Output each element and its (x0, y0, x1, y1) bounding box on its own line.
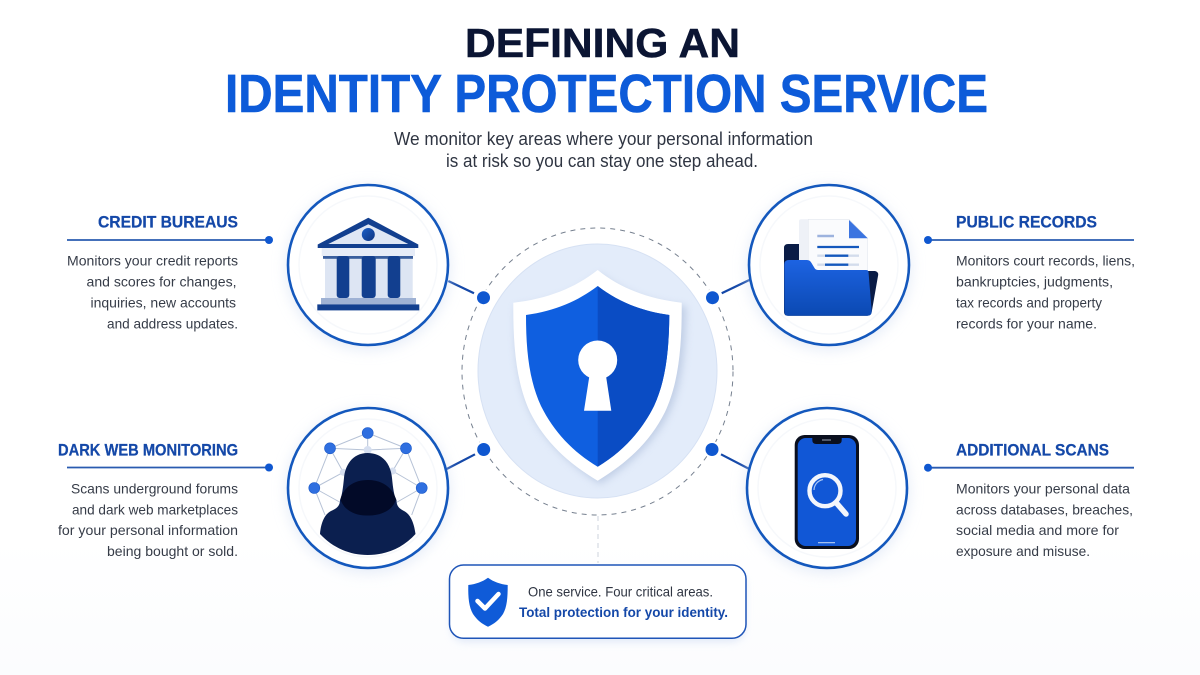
text: additional scans description: exposure and misuse. (956, 543, 1090, 559)
text: dark web monitoring description: being bought or sold. (107, 543, 238, 559)
text: public records description: tax records and property (956, 294, 1102, 310)
connector: hub to callout (597, 516, 599, 563)
text: credit bureaus description (67, 253, 238, 332)
title: DEFINING AN (465, 20, 740, 66)
panel: additional scans circle (745, 408, 909, 573)
heading: credit bureaus: CREDIT BUREAUS (98, 214, 238, 232)
panel: public records circle (747, 185, 911, 350)
panel: credit bureaus circle (286, 185, 450, 350)
text: public records description (956, 253, 1135, 332)
panel: central shield hub (462, 228, 733, 515)
text: dark web monitoring description (58, 480, 238, 559)
heading: dark web monitoring: DARK WEB MONITORING (58, 442, 238, 460)
panel: additional scans text (924, 442, 1134, 559)
heading: additional scans: ADDITIONAL SCANS (956, 442, 1109, 460)
subtitle: is at risk so you can stay one step ahead. (446, 151, 758, 171)
heading: public records: PUBLIC RECORDS (956, 214, 1097, 232)
text: callout message: One service. Four critical areas. (528, 584, 713, 600)
subtitle: We monitor key areas where your personal information (394, 129, 813, 149)
text: credit bureaus description: and scores for changes, (86, 274, 236, 290)
text: additional scans description (956, 480, 1133, 559)
icon: bank building (317, 218, 419, 310)
title: IDENTITY PROTECTION SERVICE (225, 65, 988, 124)
icon: shield with check mark (468, 578, 508, 627)
callout (450, 565, 746, 642)
text: dark web monitoring description: Scans underground forums (71, 480, 238, 496)
text: dark web monitoring description: and dark web marketplaces (72, 501, 238, 517)
text: public records description: bankruptcies, judgments, (956, 274, 1113, 290)
text: dark web monitoring description: for your personal information (58, 522, 238, 538)
text: credit bureaus description: inquiries, new accounts (90, 294, 236, 310)
subtitle (394, 129, 813, 171)
text: callout message: Total protection for your identity. (519, 604, 728, 620)
icon: hooded figure in network (309, 428, 427, 555)
text: public records description: records for your name. (956, 316, 1097, 332)
panel: dark web monitoring text (58, 442, 273, 559)
connector lines and dots (447, 280, 749, 469)
icon: phone with magnifier (795, 435, 859, 549)
text: credit bureaus description: Monitors your credit reports (67, 253, 238, 269)
icon: shield with keyhole (513, 270, 682, 481)
text: additional scans description: Monitors your personal data (956, 480, 1130, 496)
panel: public records text (924, 214, 1135, 332)
text: additional scans description: social media and more for (956, 522, 1119, 538)
icon: folder with documents (784, 219, 878, 316)
text: credit bureaus description: and address updates. (107, 316, 238, 332)
text: public records description: Monitors court records, liens, (956, 253, 1135, 269)
panel: dark web monitoring circle (286, 408, 450, 573)
text: additional scans description: across databases, breaches, (956, 501, 1133, 517)
text: callout message (519, 584, 728, 620)
title (225, 20, 988, 124)
panel: credit bureaus text (67, 214, 273, 332)
